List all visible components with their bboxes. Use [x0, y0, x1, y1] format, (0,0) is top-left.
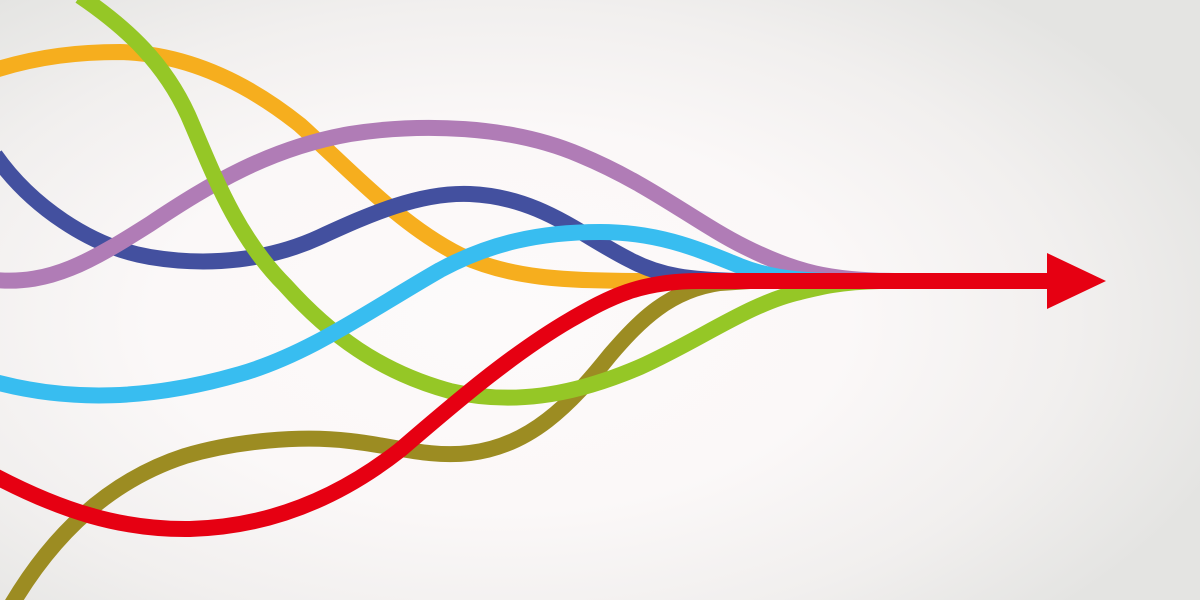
line: dark blue — [0, 155, 740, 281]
line: green — [80, 0, 880, 398]
line: light blue — [0, 232, 830, 395]
line: olive — [12, 281, 750, 600]
line: purple — [0, 128, 900, 281]
arrowhead: red — [1047, 253, 1106, 309]
line: orange — [0, 52, 650, 281]
line: red shaft — [0, 281, 1050, 529]
